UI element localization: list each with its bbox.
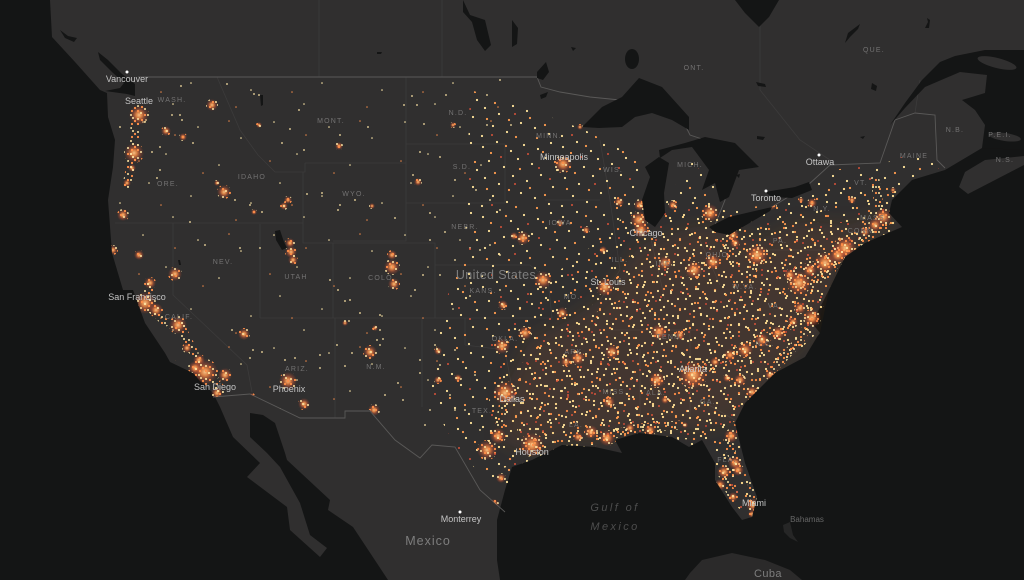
city clusters: soft cores — [108, 99, 896, 518]
population dots — [108, 78, 940, 518]
region labels: states and provinces: VA. — [768, 303, 782, 310]
lake: Winnipeg — [463, 0, 491, 51]
region labels: states and provinces: ARIZ. — [285, 366, 309, 373]
lake: Superior — [582, 78, 689, 130]
lake: Lake of the Woods — [537, 62, 549, 80]
region labels: states and provinces: WIS. — [603, 167, 623, 174]
corridors of speckled dots — [127, 125, 885, 510]
region labels: states and provinces: KANS. — [469, 288, 497, 295]
country and sea labels — [405, 268, 824, 580]
glow under dense dots — [500, 215, 895, 450]
city labels and markers: Miami — [742, 498, 766, 508]
region labels: states and provinces: IND. — [656, 261, 674, 268]
country and sea labels: Gulf of — [590, 502, 640, 514]
region labels: states and provinces: MONT. — [317, 118, 345, 125]
medium dots: central and eastern states — [430, 90, 940, 518]
city labels and markers: Minneapolis — [540, 152, 589, 162]
lake: Manicouagan — [925, 18, 930, 28]
country and sea labels: Bahamas — [790, 515, 824, 524]
region labels: states and provinces: MICH. — [677, 162, 703, 169]
lake: Winnipegosis — [512, 20, 518, 47]
water: Great Lakes and inland lakes — [60, 0, 1024, 265]
region labels: states and provinces: N.S. — [996, 157, 1014, 164]
region labels: states and provinces: MISS. — [602, 389, 628, 396]
region labels: states and provinces: TENN. — [656, 334, 684, 341]
region labels: states and provinces: QUE. — [863, 47, 885, 54]
region labels: states and provinces: NEBR. — [451, 224, 479, 231]
region labels: states and provinces — [157, 47, 1014, 464]
region labels: states and provinces: P.E.I. — [988, 132, 1012, 139]
city labels and markers: San Francisco — [108, 292, 166, 302]
city labels and markers: Phoenix — [273, 384, 306, 394]
lake: Mistassini — [845, 24, 860, 43]
city labels and markers: Houston — [515, 447, 549, 457]
region labels: states and provinces: N.Y. — [813, 206, 831, 213]
land: Bahamas — [783, 522, 798, 542]
region labels: states and provinces: NEV. — [213, 259, 233, 266]
inlet: northern Vancouver Island — [60, 30, 77, 42]
region labels: states and provinces: CALIF. — [165, 314, 193, 321]
city labels and markers: Atlanta — [679, 364, 707, 374]
region labels: states and provinces: FLA. — [717, 457, 737, 464]
region labels: states and provinces: N.D. — [449, 110, 467, 117]
lake: Great Salt Lake — [275, 230, 287, 250]
land: Nova Scotia — [959, 156, 1024, 194]
region labels: states and provinces: COLO. — [368, 275, 396, 282]
region labels: states and provinces: N.M. — [366, 364, 386, 371]
region labels: states and provinces: OHIO — [706, 252, 728, 259]
water: Gulf of St. Lawrence — [890, 50, 1024, 150]
city clusters: speckled dots — [108, 99, 896, 518]
region labels: states and provinces: GA. — [700, 399, 716, 406]
lake: Michigan — [642, 157, 669, 227]
lake: Erie — [709, 207, 772, 235]
country and sea labels: Mexico — [405, 534, 451, 548]
region labels: states and provinces: MO. — [564, 294, 580, 301]
region labels: states and provinces: IOWA — [548, 220, 572, 227]
region labels: states and provinces: OKLA. — [492, 336, 518, 343]
small lakes: Ontario and Quebec — [178, 47, 877, 265]
region labels: states and provinces: ORE. — [157, 181, 179, 188]
city labels and markers: San Diego — [194, 382, 236, 392]
region labels: states and provinces: ONT. — [684, 65, 704, 72]
sparse dots: western states — [108, 78, 505, 418]
land: Cuba — [685, 553, 802, 580]
region labels: states and provinces: WASH. — [158, 97, 186, 104]
region labels: states and provinces: ILL. — [612, 257, 628, 264]
region labels: states and provinces: UTAH — [284, 274, 308, 281]
region labels: states and provinces: MINN. — [536, 133, 562, 140]
city labels and markers: Monterrey — [441, 514, 482, 524]
region labels: states and provinces: PA. — [773, 238, 787, 245]
region labels: states and provinces: LA. — [569, 422, 583, 429]
land: Anticosti Island — [976, 53, 1018, 73]
city labels and markers: Chicago — [629, 228, 663, 238]
region labels: states and provinces: VT. — [854, 180, 868, 187]
region labels: states and provinces: TEX. — [472, 408, 492, 415]
region labels: states and provinces: S.D. — [453, 164, 471, 171]
city labels and markers: Vancouver — [106, 74, 148, 84]
hand placed scattered dots: west — [120, 80, 511, 430]
lake: Huron — [659, 137, 759, 202]
region labels: states and provinces: MAINE — [900, 153, 928, 160]
city labels and markers: St. Louis — [590, 277, 626, 287]
region labels: states and provinces: ALA. — [646, 390, 666, 397]
international border: USA and Canada — [138, 77, 945, 225]
region labels: states and provinces: IDAHO — [238, 174, 266, 181]
city labels and markers: Toronto — [751, 193, 781, 203]
country and sea labels: Mexico — [590, 521, 640, 533]
lake: Ontario — [765, 182, 812, 198]
region labels: states and provinces: CONN. — [848, 228, 876, 235]
strait: Georgia and Juan de Fuca — [98, 52, 135, 96]
international border: USA and Mexico — [213, 394, 505, 512]
bay: James Bay — [735, 0, 779, 27]
dense dots: south and east — [485, 180, 905, 518]
region labels: states and provinces: WYO. — [342, 191, 366, 198]
country and sea labels: United States — [456, 268, 536, 282]
city labels and markers — [106, 70, 834, 524]
region labels: states and provinces: MASS. — [860, 215, 888, 222]
country and sea labels: Cuba — [754, 568, 782, 580]
region labels: states and provinces: ARK. — [564, 349, 586, 356]
region labels: states and provinces: W.VA. — [733, 284, 757, 291]
lake: Nipigon — [625, 49, 639, 69]
city labels and markers: Seattle — [125, 96, 153, 106]
region labels: states and provinces: N.C. — [756, 341, 774, 348]
city labels and markers: Dallas — [499, 394, 525, 404]
land: Prince Edward Island — [989, 131, 1021, 143]
state and province borders — [115, 0, 920, 420]
city labels and markers: Ottawa — [806, 157, 834, 167]
region labels: states and provinces: N.B. — [946, 127, 964, 134]
